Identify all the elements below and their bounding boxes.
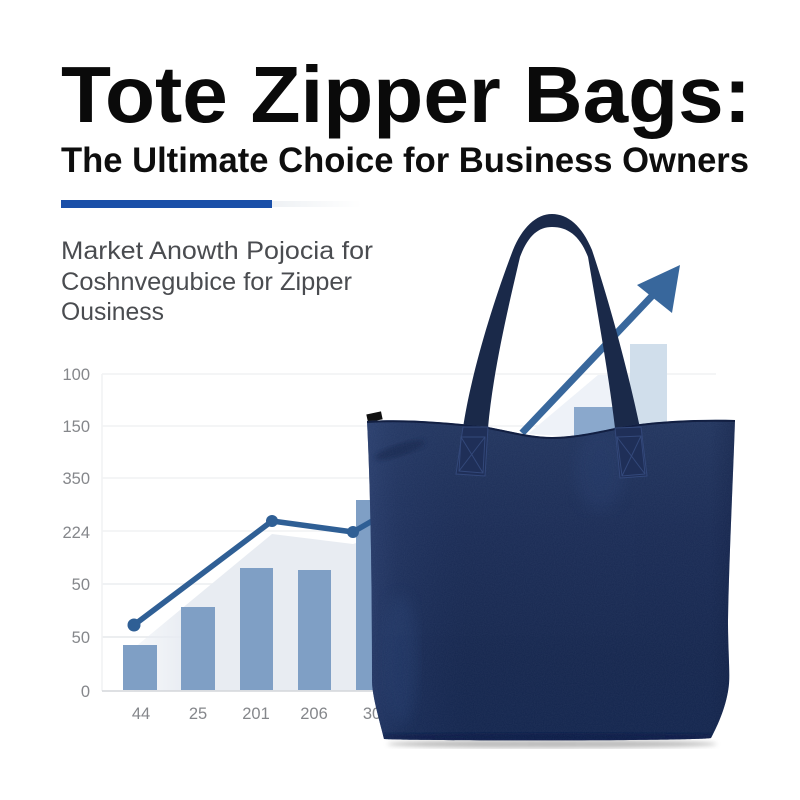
y axis labels: 224 — [62, 524, 90, 542]
chart heading — [61, 237, 373, 326]
axis — [102, 690, 400, 692]
handles — [463, 214, 640, 428]
subtitle: The Ultimate Choice for Business Owners — [61, 141, 749, 180]
left handle patch — [456, 427, 488, 476]
zipper pull — [366, 411, 383, 422]
body — [367, 420, 735, 740]
x axis labels: 206 — [300, 705, 328, 723]
accent rule — [61, 200, 362, 208]
y axis labels: 50 — [72, 629, 90, 647]
trend markers — [128, 515, 359, 632]
y axis labels — [62, 366, 90, 701]
grid lines — [102, 374, 716, 691]
x axis labels: 201 — [242, 705, 270, 723]
x axis labels: 44 — [132, 705, 150, 723]
ground shadow — [387, 740, 717, 748]
y axis labels: 50 — [72, 576, 90, 594]
chart: market growth — [62, 265, 716, 723]
x axis labels: 25 — [189, 705, 207, 723]
y axis labels: 350 — [62, 470, 90, 488]
x axis labels: 30 — [363, 705, 381, 723]
area under trend line — [134, 530, 400, 691]
title: Tote Zipper Bags: — [61, 50, 751, 139]
upper area behind arrow — [528, 375, 632, 440]
trend line — [134, 296, 652, 625]
y axis labels: 0 — [81, 683, 90, 701]
chart heading: Coshnvegubice for Zipper — [61, 268, 352, 296]
chart heading: Market Anowth Pojocia for — [61, 237, 373, 265]
tote bag — [360, 214, 740, 748]
bars — [123, 344, 667, 690]
x axis labels — [132, 705, 381, 723]
y axis labels: 100 — [62, 366, 90, 384]
y axis labels: 150 — [62, 418, 90, 436]
arrow head — [637, 265, 680, 313]
right handle patch — [615, 427, 647, 478]
chart heading: Ousiness — [61, 298, 164, 326]
